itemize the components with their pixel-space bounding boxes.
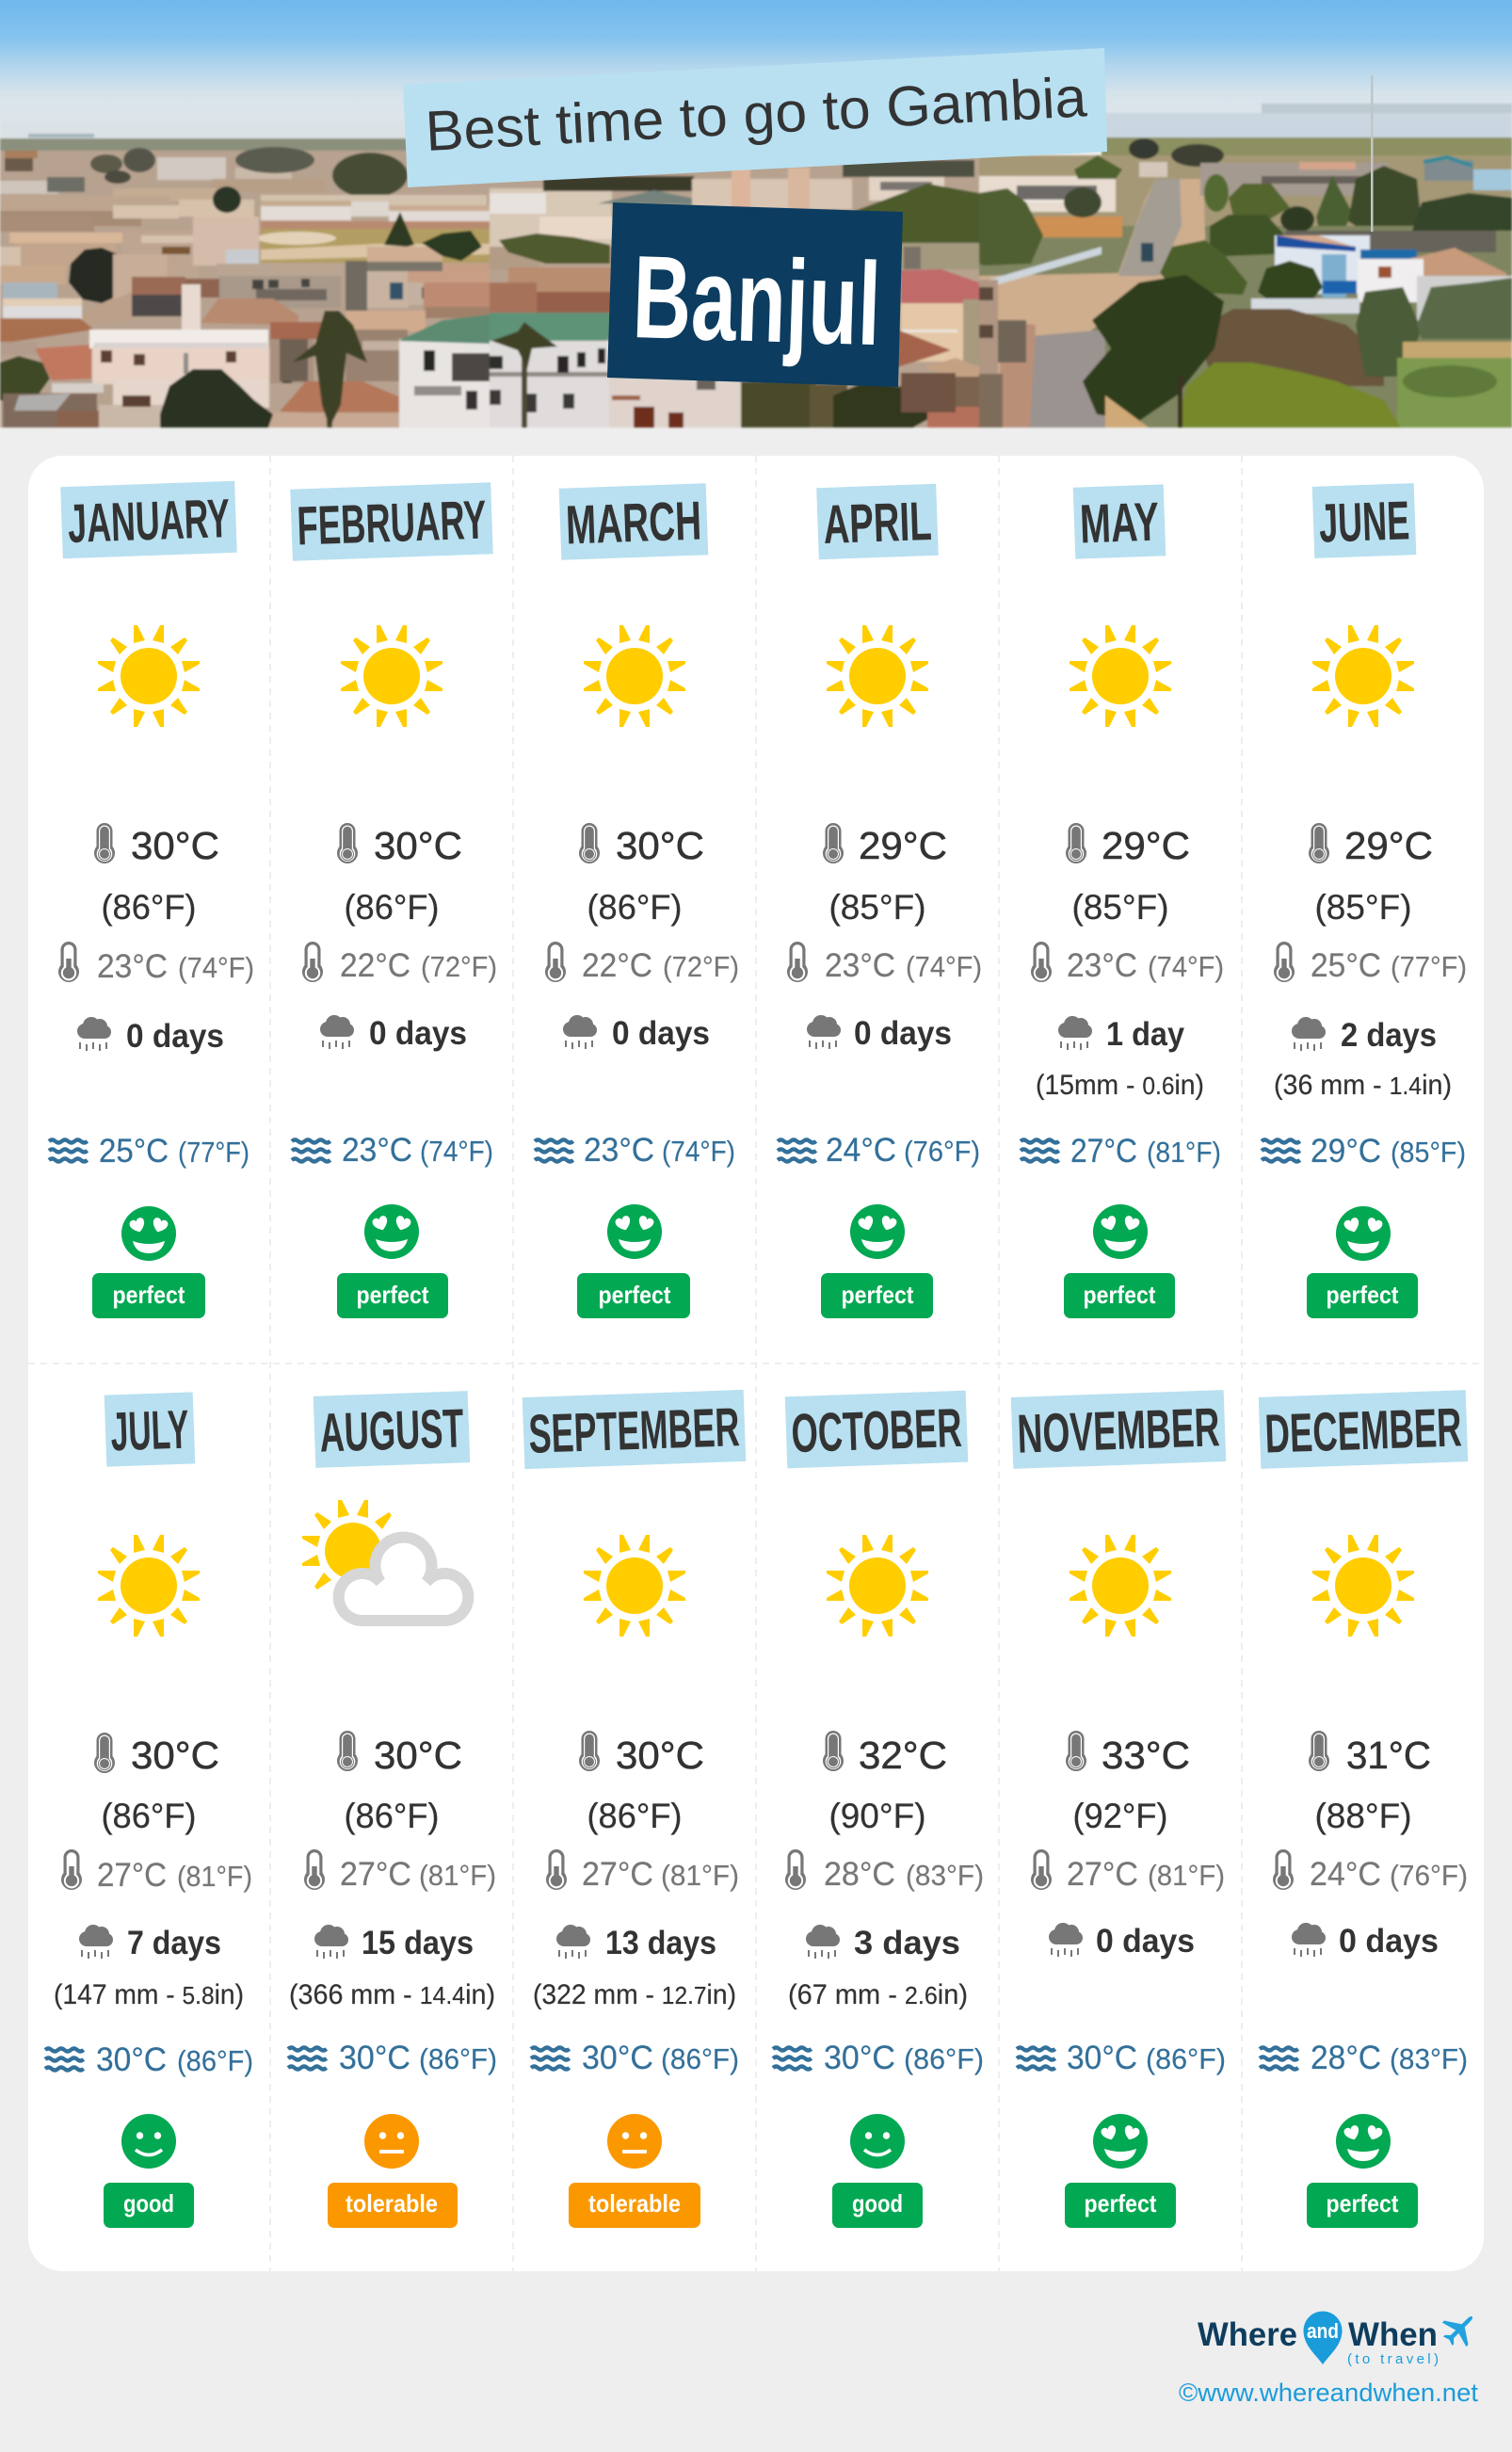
- sea temperature: (81°F): [1147, 1136, 1221, 1169]
- rainfall: [77, 1017, 224, 1055]
- sea temperature: [288, 2040, 497, 2076]
- rainfall: [1049, 1923, 1195, 1960]
- icon: sun: [827, 1535, 928, 1637]
- low temperature: 27°C: [340, 1856, 411, 1893]
- rating: [1065, 2114, 1176, 2228]
- rating: [328, 2114, 458, 2228]
- main card: [28, 456, 1484, 2271]
- rainfall: [1292, 1923, 1439, 1960]
- field and paths: [261, 229, 490, 263]
- month label: OCTOBER: [790, 1397, 963, 1464]
- month label: NOVEMBER: [1016, 1396, 1221, 1465]
- month label: AUGUST: [318, 1397, 465, 1464]
- sea temperature: (77°F): [178, 1136, 249, 1169]
- high temperature: [579, 1731, 704, 1835]
- low temperature: [1031, 1849, 1225, 1893]
- sea temperature: [535, 1132, 735, 1169]
- sea temperature: 23°C: [342, 1132, 412, 1169]
- panel: April: [778, 484, 982, 1318]
- high temperature: (90°F): [828, 1797, 926, 1835]
- high temperature: [337, 823, 462, 927]
- sea temperature: (74°F): [420, 1135, 493, 1168]
- panel: February: [290, 482, 497, 1318]
- panel: January: [49, 481, 254, 1318]
- sea temperature: [531, 2040, 739, 2076]
- sea temperature: (86°F): [419, 2042, 497, 2075]
- sea temperature: [1021, 1133, 1221, 1170]
- high temperature: [823, 823, 947, 927]
- low temperature: (77°F): [1391, 950, 1467, 983]
- panel: December: [1259, 1390, 1468, 2228]
- sea temperature: 30°C: [1067, 2040, 1137, 2076]
- panel: May: [1021, 484, 1224, 1318]
- month label: [1312, 483, 1416, 558]
- title text: Best time to go to Gambia: [424, 65, 1088, 163]
- high temperature: 31°C: [1346, 1734, 1431, 1777]
- month label: [290, 482, 493, 561]
- month label: JULY: [109, 1399, 190, 1462]
- sea temperature: [45, 2041, 253, 2078]
- month label: FEBRUARY: [296, 490, 488, 557]
- logo: Where and When: (to travel): [1347, 2351, 1439, 2367]
- panel: June: [1262, 483, 1467, 1318]
- low temperature: [58, 942, 254, 985]
- high temperature: (86°F): [345, 888, 439, 927]
- low temperature: 23°C: [825, 947, 895, 984]
- rainfall: (322 mm - 12.7in): [533, 1979, 736, 2010]
- month label: [1011, 1390, 1226, 1469]
- logo: Where and When: and: [1307, 2319, 1339, 2343]
- high temperature: 33°C: [1102, 1734, 1190, 1777]
- rating: perfect: [1326, 2189, 1399, 2218]
- low temperature: (83°F): [906, 1859, 984, 1892]
- high temperature: (85°F): [1314, 888, 1412, 927]
- icon: sun: [827, 625, 928, 727]
- low temperature: (72°F): [663, 950, 739, 983]
- rainfall: 0 days: [1339, 1923, 1439, 1960]
- sea temperature: [49, 1133, 249, 1170]
- sea temperature: 30°C: [96, 2041, 167, 2078]
- rainfall: 3 days: [854, 1925, 960, 1961]
- low temperature: 27°C: [1067, 1856, 1138, 1893]
- rainfall: [320, 1015, 467, 1052]
- low temperature: [304, 1849, 496, 1893]
- logo: Where and When: [1198, 2305, 1484, 2367]
- rainfall: [533, 1925, 736, 2010]
- low temperature: (72°F): [421, 950, 497, 983]
- rainfall: 2 days: [1341, 1017, 1437, 1054]
- high temperature: (86°F): [587, 888, 682, 927]
- low temperature: [302, 942, 497, 984]
- icon: map pin: [1303, 2311, 1343, 2364]
- low temperature: [61, 1849, 252, 1894]
- high temperature: [94, 1733, 219, 1835]
- high temperature: 29°C: [1102, 824, 1190, 867]
- sea temperature: (86°F): [661, 2042, 739, 2075]
- sea temperature: [1260, 2040, 1468, 2076]
- low temperature: 22°C: [582, 947, 652, 984]
- rainfall: (147 mm - 5.8in): [54, 1979, 244, 2010]
- month label: SEPTEMBER: [527, 1396, 741, 1465]
- low temperature: (81°F): [177, 1860, 252, 1893]
- website credit: ©www.whereandwhen.net: [1179, 2379, 1478, 2407]
- far buildings and trees, left: [5, 151, 38, 158]
- sea temperature: (76°F): [904, 1135, 980, 1168]
- low temperature: [545, 942, 739, 984]
- icon: sun: [98, 1535, 200, 1637]
- high temperature: 30°C: [616, 824, 704, 867]
- low temperature: (81°F): [1148, 1859, 1225, 1892]
- high temperature: [1066, 1731, 1190, 1835]
- rating: [337, 1204, 448, 1318]
- rating: [821, 1204, 933, 1318]
- month label: APRIL: [822, 491, 933, 556]
- rainfall: 15 days: [362, 1925, 474, 1961]
- sea temperature: 23°C: [584, 1132, 654, 1169]
- icon: sun behind cloud: [302, 1500, 468, 1621]
- panel: August: [288, 1391, 497, 2228]
- month label: [314, 1391, 470, 1468]
- rating: perfect: [113, 1281, 185, 1309]
- high temperature: [337, 1731, 462, 1835]
- low temperature: (74°F): [1148, 950, 1224, 983]
- month label: MAY: [1079, 492, 1160, 555]
- low temperature: 28°C: [824, 1856, 895, 1893]
- rating: tolerable: [346, 2189, 438, 2218]
- high temperature: 32°C: [859, 1734, 947, 1777]
- high temperature: (88°F): [1314, 1797, 1412, 1835]
- month label: [816, 484, 939, 559]
- rainfall: [807, 1015, 952, 1052]
- rainfall: [1036, 1016, 1204, 1101]
- rainfall: 0 days: [126, 1018, 224, 1055]
- right: road and town: [979, 179, 1207, 427]
- rating: [1064, 1204, 1175, 1318]
- rainfall: [1274, 1017, 1452, 1101]
- icon: sun: [341, 625, 442, 727]
- panel: October: [773, 1391, 984, 2228]
- sea temperature: 30°C: [339, 2040, 410, 2076]
- low temperature: 22°C: [340, 947, 410, 984]
- icon: sun: [1070, 1535, 1171, 1637]
- rating: [577, 1204, 690, 1318]
- city banner: [607, 202, 903, 387]
- sea temperature: 24°C: [826, 1132, 896, 1169]
- rainfall: [563, 1015, 710, 1052]
- rating: [832, 2114, 923, 2228]
- rating: good: [852, 2189, 903, 2218]
- rainfall: 13 days: [605, 1925, 716, 1961]
- panel: September: [523, 1390, 746, 2228]
- rating: perfect: [1326, 1281, 1399, 1309]
- rainfall: [788, 1925, 968, 2010]
- high temperature: 30°C: [374, 1734, 462, 1777]
- high temperature: 30°C: [131, 824, 219, 867]
- title banner: [403, 48, 1107, 187]
- rating: [92, 1206, 205, 1318]
- low temperature: 25°C: [1311, 947, 1381, 984]
- low temperature: (74°F): [178, 951, 254, 984]
- month label: [105, 1392, 195, 1467]
- rainfall: (67 mm - 2.6in): [788, 1979, 968, 2010]
- month label: [785, 1391, 968, 1468]
- high temperature: 29°C: [859, 824, 947, 867]
- month label: [523, 1390, 746, 1469]
- sea temperature: 25°C: [99, 1133, 169, 1170]
- month label: JUNE: [1318, 490, 1410, 555]
- high temperature: (92°F): [1073, 1797, 1167, 1835]
- high temperature: 29°C: [1344, 824, 1433, 867]
- high temperature: [823, 1731, 947, 1835]
- icon: sun: [98, 625, 200, 727]
- month label: [1073, 484, 1166, 559]
- sea temperature: (86°F): [177, 2044, 253, 2077]
- rainfall: 1 day: [1106, 1016, 1184, 1053]
- high temperature: (86°F): [587, 1797, 682, 1835]
- rainfall: (15mm - 0.6in): [1036, 1070, 1204, 1101]
- icon: sun: [584, 625, 685, 727]
- low temperature: 23°C: [1067, 947, 1137, 984]
- high temperature: 30°C: [374, 824, 462, 867]
- low temperature: 27°C: [582, 1856, 653, 1893]
- sea temperature: (86°F): [1146, 2042, 1226, 2075]
- high temperature: [1066, 823, 1190, 927]
- rating: [569, 2114, 700, 2228]
- sea temperature: [773, 2040, 984, 2076]
- low temperature: (81°F): [419, 1859, 496, 1892]
- icon: sun: [584, 1535, 685, 1637]
- sea temperature: 30°C: [582, 2040, 653, 2076]
- low temperature: (76°F): [1390, 1859, 1468, 1892]
- header photo of Banjul: [0, 0, 1512, 427]
- high temperature: (85°F): [828, 888, 926, 927]
- rating: tolerable: [588, 2189, 681, 2218]
- sea temperature: (83°F): [1390, 2042, 1468, 2075]
- sea temperature: [778, 1132, 980, 1169]
- icon: sun: [1312, 1535, 1414, 1637]
- panel: November: [1011, 1390, 1226, 2228]
- rating: [104, 2114, 194, 2228]
- rating: good: [123, 2189, 174, 2218]
- rating: perfect: [356, 1281, 429, 1309]
- low temperature: [1273, 1849, 1468, 1893]
- high temperature: (85°F): [1071, 888, 1169, 927]
- high temperature: (86°F): [102, 1797, 196, 1835]
- rating: perfect: [1085, 2189, 1157, 2218]
- high temperature: [94, 823, 219, 927]
- low temperature: (81°F): [661, 1859, 739, 1892]
- icon: sun: [1070, 625, 1171, 727]
- low temperature: 24°C: [1310, 1856, 1381, 1893]
- month label: MARCH: [565, 491, 702, 556]
- high temperature: (86°F): [102, 888, 196, 927]
- rainfall: [54, 1925, 244, 2010]
- logo: Where and When: When: [1348, 2316, 1438, 2353]
- high temperature: [579, 823, 704, 927]
- rainfall: 7 days: [127, 1925, 221, 1961]
- low temperature: [1274, 942, 1467, 984]
- centre: [490, 188, 612, 247]
- low temperature: (74°F): [906, 950, 982, 983]
- logo: Where and When: Where: [1198, 2316, 1297, 2353]
- rainfall: 0 days: [854, 1015, 952, 1052]
- low temperature: [546, 1849, 739, 1893]
- high temperature: [1309, 823, 1433, 927]
- rating: [1307, 2114, 1418, 2228]
- high temperature: (86°F): [345, 1797, 439, 1835]
- panel: July: [45, 1392, 253, 2228]
- low temperature: [1031, 942, 1224, 984]
- sea temperature: 30°C: [824, 2040, 895, 2076]
- rainfall: [289, 1925, 495, 2010]
- city name: Banjul: [631, 232, 882, 370]
- rainfall: 0 days: [1096, 1923, 1195, 1960]
- sea temperature: [1017, 2040, 1226, 2076]
- rainfall: (366 mm - 14.4in): [289, 1979, 495, 2010]
- sea temperature: (86°F): [904, 2042, 984, 2075]
- month label: [559, 483, 708, 560]
- icon: plane: [1436, 2305, 1484, 2353]
- rating: perfect: [599, 1281, 671, 1309]
- sea temperature: 29°C: [1311, 1133, 1381, 1170]
- rainfall: (36 mm - 1.4in): [1274, 1070, 1452, 1101]
- low temperature: 27°C: [97, 1857, 167, 1894]
- rating: [1307, 1206, 1418, 1318]
- low temperature: 23°C: [97, 948, 168, 985]
- sea temperature: 28°C: [1311, 2040, 1381, 2076]
- rating: perfect: [1083, 1281, 1156, 1309]
- high temperature: 30°C: [616, 1734, 704, 1777]
- sea temperature: [1262, 1133, 1466, 1170]
- low temperature: [787, 942, 982, 984]
- panel: March: [535, 483, 739, 1318]
- rating: perfect: [842, 1281, 914, 1309]
- high temperature: 30°C: [131, 1734, 219, 1777]
- sea temperature: 27°C: [1070, 1133, 1137, 1170]
- icon: sun: [1312, 625, 1414, 727]
- rainfall: 0 days: [612, 1015, 710, 1052]
- rainfall: 0 days: [369, 1015, 467, 1052]
- month label: [60, 481, 237, 558]
- sea temperature: (85°F): [1391, 1136, 1466, 1169]
- high temperature: [1309, 1731, 1431, 1835]
- month label: JANUARY: [67, 488, 231, 555]
- sea temperature: [292, 1132, 493, 1169]
- sea temperature: (74°F): [662, 1135, 735, 1168]
- low temperature: [785, 1849, 984, 1893]
